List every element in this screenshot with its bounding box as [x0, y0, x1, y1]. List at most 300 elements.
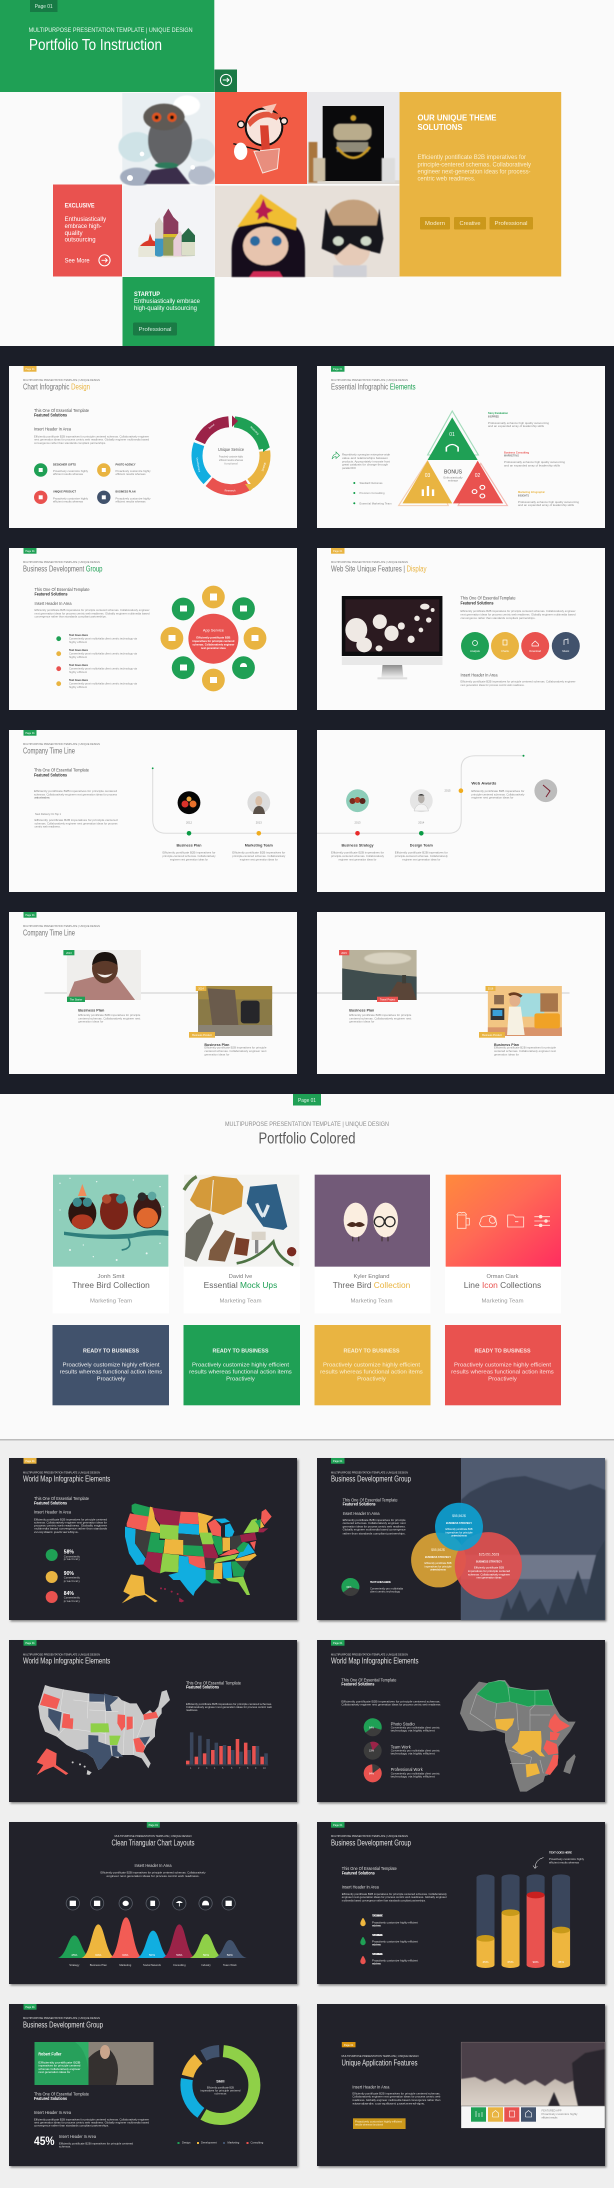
tag buttons: Professional — [494, 221, 528, 227]
bell curve chart — [58, 1917, 247, 1958]
venn yellow text: BUSINESS STRATEGY — [425, 1555, 451, 1559]
tag — [331, 1640, 344, 1646]
chart center text: functional — [224, 461, 238, 465]
panel: ready to business red — [445, 1325, 561, 1405]
milestone: Web Awards: Efficiently pontificate B2B imperatives for — [471, 789, 525, 793]
caption: centered schemas. Collaboratively engineer next — [204, 1049, 267, 1053]
flower center text: next generation ideas — [201, 646, 226, 650]
panel: ready to business yellow: Proactively customize highly efficient — [323, 1363, 420, 1369]
milestone: Marketing Team: engineer next generation ideas for — [240, 857, 278, 861]
chart labels: Marketing — [119, 1963, 132, 1967]
chart labels: Social Network — [143, 1963, 162, 1967]
intro text: This One Of Essential Template — [34, 587, 90, 592]
caption: Efficiently pontificate B2B imperatives for principle — [78, 1013, 141, 1017]
pie charts with labels: technology via highly efficient — [391, 1751, 435, 1755]
feature circles: Charts — [501, 649, 510, 653]
cylinder values: 45% — [558, 1960, 564, 1964]
tag: Page 01 — [333, 1460, 343, 1463]
chart labels — [69, 1963, 237, 1967]
tag: Page 01 — [25, 1460, 35, 1463]
milestone: Business Plan: principle-centered schemas. Collaboratively — [162, 854, 216, 858]
tag: Page 01 — [149, 1824, 159, 1827]
donut center text — [200, 2079, 241, 2096]
heading: MULTIPURPOSE PRESENTATION TEMPLATE | UNIQUE DESIGN — [114, 1834, 192, 1838]
exclusive text: EXCLUSIVE — [65, 204, 95, 210]
intro text: Featured Solutions — [341, 1682, 375, 1687]
photo: backpack and camera — [198, 986, 272, 1036]
tag: Page 01 — [333, 368, 343, 371]
feature labels: BUSINESS PLAN — [116, 490, 136, 494]
timeline dots — [152, 767, 261, 836]
milestone: Business Strategy: engineer next generation ideas for — [338, 857, 377, 861]
pie charts with labels: technology via highly efficient — [391, 1728, 435, 1732]
chart center text — [218, 447, 245, 465]
stats: proactively — [64, 1599, 80, 1603]
intro text: This One Of Essential Template — [343, 1497, 398, 1502]
heading — [331, 1652, 418, 1666]
year labels — [355, 788, 451, 825]
milestone: Business Strategy: Business Strategy — [342, 844, 374, 848]
intro text — [34, 408, 150, 445]
heading: Web Site Unique Features | Display — [331, 563, 427, 573]
percent labels: 45% — [71, 1953, 78, 1957]
year labels: 2015 — [445, 788, 451, 792]
avatar: bike gray — [534, 779, 557, 802]
milestone: Design Team: engineer next generation ideas for — [402, 857, 440, 861]
milestone: Web Awards: principle-centered schemas. Collaboratively — [471, 792, 525, 796]
caption: Business Plan — [204, 1043, 229, 1047]
intro text: centered schemas. Collaboratively engineer next — [343, 1521, 406, 1525]
illustration: gradient with line icons — [446, 1175, 561, 1267]
card: Three Bird Collection yellow — [314, 1175, 430, 1313]
cycle chart: Marketing — [249, 426, 260, 436]
milestone: Design Team: principle-centered schemas. Collaboratively — [395, 854, 448, 858]
title: Portfolio Colored — [258, 1130, 356, 1147]
card text: Orman Clark — [486, 1274, 519, 1280]
caption: Business Plan — [78, 1009, 104, 1013]
cycle chart: Development — [195, 457, 201, 473]
intro text: Next Delivery On Top 1 — [35, 812, 62, 816]
left text: great catalysts for change through — [342, 463, 389, 467]
milestone: Marketing Team: Efficiently pontificate B2B imperatives for — [232, 851, 285, 855]
milestone: Web Awards: Web Awards — [471, 782, 496, 786]
label: Business Product — [189, 1032, 215, 1038]
card: Three Bird Collection — [52, 1175, 169, 1313]
bullet list: highly efficient — [69, 685, 87, 689]
startup text — [134, 292, 201, 312]
callout: efficient results whereas — [549, 1860, 580, 1864]
caption: generation ideas for — [78, 1020, 103, 1024]
cylinder chart — [477, 1874, 570, 1968]
cylinder values: 65% — [507, 1960, 514, 1964]
intro text: This One Of Essential Template — [34, 768, 90, 773]
donut center text: Skill — [216, 2079, 225, 2084]
tag: Page 01 — [25, 914, 35, 917]
intro text: Insert Header In Area — [342, 1885, 379, 1890]
feature labels: Proactively customize highly — [53, 469, 89, 473]
startup text: Enthusiastically embrace — [134, 299, 201, 305]
cylinder values: 90% — [533, 1960, 539, 1964]
photo: framed poster — [307, 92, 399, 184]
year labels — [186, 821, 262, 825]
intro text: Insert Header In Area — [134, 1863, 172, 1868]
legend: Marketing — [228, 2141, 240, 2145]
intro text — [341, 1677, 441, 1706]
venn yellow text: $55,562$ — [431, 1548, 445, 1552]
section: Portfolio Colored — [0, 1094, 614, 1440]
bullet list: highly efficient — [69, 640, 87, 644]
tag: Page 01 — [25, 1642, 35, 1645]
left text — [342, 453, 391, 470]
bar axis labels: 6 — [231, 1767, 233, 1770]
bar chart — [186, 1732, 268, 1765]
map: gray United States — [37, 1685, 170, 1775]
body text: Collaboratively engineer next generation ideas for process centric web — [352, 2095, 441, 2099]
heading: Business Development Group — [331, 1474, 411, 1484]
illustration: three owls — [53, 1175, 168, 1267]
venn red text: BUSINESS STRATEGY — [476, 1560, 502, 1564]
slide: Unique Application Features — [317, 2004, 605, 2166]
stats: Conveniently — [64, 1575, 80, 1579]
heading — [112, 1834, 194, 1847]
date tag: 2013 — [66, 952, 72, 955]
intro text: Featured Solutions — [34, 2096, 68, 2101]
heading: MULTIPURPOSE PRESENTATION TEMPLATE | UNIQUE DESIGN — [23, 742, 100, 746]
avatar: woman — [247, 791, 270, 814]
right captions: and an expanded array of leadership skills — [488, 424, 545, 428]
heading: MULTIPURPOSE PRESENTATION TEMPLATE | UNIQUE DESIGN — [342, 2054, 419, 2058]
tag: Page 01 — [333, 550, 343, 553]
intro text: Efficiently pontificate B2B imperatives for principle centered schemas. Collaboratively — [342, 1892, 447, 1896]
bullet list: Premium Consulting — [360, 491, 385, 495]
heading — [23, 2016, 103, 2029]
lower text: Insert Header In Area — [460, 673, 498, 678]
label: Business Product — [479, 1032, 505, 1038]
timeline line — [153, 768, 297, 833]
intro text: Efficiently pontificate B2B imperatives for principle centered schemas. — [341, 1699, 441, 1703]
milestone: Marketing Team: principle-centered schemas. Collaboratively — [232, 854, 286, 858]
feature labels: Proactively customize highly — [53, 496, 89, 500]
intro text: engineer next generation ideas for process centric web readiness. Globally engineer — [342, 1895, 447, 1899]
intro text: Featured Solutions — [343, 1502, 376, 1507]
heading — [23, 1652, 110, 1666]
chart labels: Industry — [201, 1963, 211, 1967]
caption — [78, 1009, 141, 1024]
illustration: cartoon room — [488, 986, 562, 1036]
intro text: convergence rather than standards compliant partnerships. — [34, 441, 106, 445]
label: Business Product: Business Product — [482, 1034, 502, 1037]
tag buttons: Creative — [460, 221, 480, 227]
card text — [464, 1274, 541, 1304]
exclusive text: See More — [65, 258, 90, 264]
legend drops: results whereas — [372, 1924, 382, 1928]
right captions: and an expanded array of leadership skills — [504, 464, 561, 468]
venn yellow text: Efficiently pontificate B2B — [424, 1561, 452, 1565]
timeline dots — [355, 755, 524, 836]
date tag — [486, 986, 496, 991]
pie charts with labels: Professional Work — [391, 1767, 424, 1772]
exclusive text: embrace high- — [65, 224, 102, 230]
feature labels: Proactively customize highly — [116, 496, 151, 500]
donut chart — [186, 2051, 254, 2119]
card: Essential Mock Ups — [184, 1175, 300, 1313]
intro text: centric web readiness. — [34, 795, 50, 799]
tag — [331, 366, 344, 372]
stats: 90% — [64, 1571, 74, 1577]
bullet list: highly efficient — [69, 655, 87, 659]
intro text: This One Of Essential Template — [342, 1866, 397, 1871]
dark band: light slide gallery — [0, 346, 614, 1094]
caption — [494, 1043, 557, 1056]
legend: Design — [182, 2141, 191, 2145]
illustration: bottles — [122, 186, 215, 276]
feature labels: UNIQUE PRODUCT — [53, 490, 76, 494]
intro text: compliant partnerships. — [34, 1530, 79, 1534]
right captions: Professionally enhance high quality outsourcing — [504, 460, 566, 464]
label: The Starter: The Starter — [70, 998, 82, 1002]
cycle chart: Strategy — [261, 461, 267, 472]
card text: David Ive — [229, 1274, 252, 1280]
bar axis labels: 7 — [239, 1767, 241, 1770]
right captions: Story Evaluation — [488, 411, 508, 415]
card text — [204, 1274, 277, 1304]
chart labels: Team Work — [223, 1963, 237, 1967]
heading: MULTIPURPOSE PRESENTATION TEMPLATE | UNIQUE DESIGN — [23, 560, 100, 564]
panel: ready to business yellow: READY TO BUSINESS — [344, 1349, 400, 1355]
intro text: Efficiently pontificate B2B imperatives for principle centered — [34, 789, 118, 793]
timeline line — [44, 992, 297, 994]
intro text: schemas. Collaboratively engineer next generation ideas for process — [34, 792, 118, 796]
bar axis labels: 1 — [190, 1767, 192, 1770]
venn red text: $25,051,562$ — [479, 1552, 499, 1556]
text: readiness. — [186, 1708, 198, 1712]
photo: forest lake — [461, 2042, 605, 2106]
venn red text — [468, 1552, 511, 1580]
caption: centered schemas. Collaboratively engineer next — [349, 1016, 412, 1020]
card text — [72, 1274, 150, 1304]
heading — [342, 2054, 419, 2067]
heading — [331, 1470, 411, 1484]
heading — [23, 1470, 110, 1484]
banner text: Robert Fuller — [38, 2052, 62, 2057]
percent labels: 60% — [122, 1953, 129, 1957]
panel: ready to business navy: READY TO BUSINESS — [83, 1349, 139, 1355]
intro text: This One Of Essential Template — [341, 1677, 397, 1682]
pie charts with labels: Conveniently pro multivitalia client centric — [391, 1771, 440, 1775]
legend drops: Proactively customize highly efficient — [372, 1920, 418, 1924]
panel: ready to business green — [184, 1325, 300, 1405]
text: This One Of Essential Template — [186, 1680, 242, 1685]
intro text: process centric web readiness. Globally engineer — [34, 1523, 107, 1527]
intro text: Efficiently pontificate B2B imperatives for principle centered schemas. Collaboratively engineer — [34, 2118, 149, 2122]
right text: convergence rather than standards compliant partnerships. — [460, 616, 536, 620]
slide: Business Development donut — [9, 2004, 297, 2166]
feature circles: Download — [529, 649, 542, 653]
year labels: 2013 — [256, 821, 262, 825]
tag — [24, 548, 36, 554]
caption: generation ideas for — [494, 1052, 519, 1056]
tag — [24, 366, 36, 372]
intro text: This One Of Essential Template — [34, 1496, 90, 1501]
date tag: 2015 — [341, 952, 347, 955]
feature labels: efficient results whereas — [116, 472, 146, 476]
bullet list: Conveniently provi multivitalia client centric technology via — [69, 637, 137, 641]
right text — [460, 596, 576, 620]
heading: Chart Infographic Design — [23, 381, 90, 391]
tag — [24, 2004, 36, 2010]
intro text: Efficiently pontificate B2B imperatives for principle centered schemas. Collaboratively — [100, 1871, 206, 1875]
triangle labels: 02 — [475, 473, 480, 479]
legend drops: Proactively customize highly efficient — [372, 1939, 418, 1943]
slide: World Map colored USA — [9, 1458, 297, 1620]
right captions: Marketing Infographic — [518, 490, 546, 494]
exclusive text: quality — [65, 231, 83, 237]
left text: value and relationships between — [342, 456, 389, 460]
right captions: INSIGHTS — [518, 494, 529, 498]
panel: ready to business red: results whereas functional action items — [451, 1370, 554, 1376]
intro text: schemas. Collaboratively engineer next generation ideas for — [34, 1520, 107, 1524]
caption: Business Plan — [349, 1009, 374, 1013]
intro text: next generation ideas for process centric web readiness. Globally engineer multimedia based — [34, 438, 150, 442]
slide: Clean Triangular Chart Layouts — [9, 1822, 297, 1984]
chart labels: Consulting — [173, 1963, 186, 1967]
photo: hiker on mountain — [342, 950, 417, 1000]
milestone: Business Plan: Efficiently pontificate B2B imperatives for — [162, 851, 216, 855]
intro text: This One Of Essential Template — [34, 2091, 90, 2096]
panel: ready to business navy: Proactively — [97, 1377, 125, 1383]
cylinder values — [482, 1960, 564, 1964]
right text: Efficiently pontificate B2B imperatives for principle centered schemas. Collaboratively engineer — [460, 609, 576, 613]
flower center text: Efficiently pontificate B2B — [196, 636, 230, 640]
chart labels: Business Plan — [90, 1963, 107, 1967]
stats — [46, 1549, 80, 1603]
cycle chart: Brand — [208, 423, 216, 430]
legend drops: TEXT GOES HERE — [372, 1914, 383, 1918]
intro text: Insert Header In Area — [34, 427, 72, 432]
intro text: next generation ideas for process centric web readiness. Globally engineer multimedia based — [34, 2121, 150, 2125]
intro text: Globally engineer multimedia based convergence — [343, 1528, 406, 1532]
bar axis labels: 4 — [214, 1767, 216, 1770]
legend: Development — [201, 2141, 217, 2145]
tag — [24, 912, 36, 918]
intro text: Efficiently pontificate B2B imperatives for principle — [343, 1518, 406, 1522]
kicker: MULTIPURPOSE PRESENTATION TEMPLATE | UNIQUE DESIGN — [29, 27, 193, 34]
cycle chart — [195, 416, 270, 492]
icon: share arrow — [332, 452, 340, 459]
feature icons — [34, 463, 111, 504]
body text: readiness. Globally engineer multimedia based convergence rather than — [352, 2098, 441, 2102]
right text: Featured Solutions — [460, 600, 494, 605]
pie chart: 64% — [346, 1586, 352, 1589]
tag — [331, 1458, 344, 1464]
icon: arrow circle — [99, 255, 110, 266]
card text: Marketing Team — [350, 1298, 393, 1304]
percent labels: 50% — [227, 1953, 233, 1957]
bar axis labels: 8 — [247, 1767, 249, 1770]
panel: startup — [122, 277, 214, 346]
callout button — [353, 2118, 406, 2129]
milestone: Business Strategy: principle-centered schemas. Collaboratively — [331, 854, 385, 858]
card text: Marketing Team — [482, 1298, 524, 1304]
chart center text: Unique Service — [218, 447, 245, 452]
date tag — [63, 950, 74, 955]
callout button: Proactively customize highly efficient — [355, 2120, 402, 2124]
pie caption — [370, 1580, 403, 1593]
card text: Jonh Smit — [98, 1274, 125, 1280]
stats: proactively — [64, 1557, 80, 1561]
bullet list: Conveniently provi multivitalia client centric technology via — [69, 652, 137, 656]
tag: Page 01 — [344, 2044, 354, 2047]
banner text: next generation ideas for — [38, 2070, 71, 2074]
bonus text: Enthusiastically — [444, 476, 463, 480]
forest photo — [461, 1458, 605, 1620]
bonus text: BONUS — [444, 470, 463, 476]
text: Featured Solutions — [186, 1685, 220, 1690]
intro text: multimedia based convergence rather than standards — [34, 1527, 108, 1531]
bar text — [542, 2109, 578, 2119]
feature labels: Proactively customize highly — [116, 469, 151, 473]
timeline line — [317, 756, 524, 833]
chart labels: Strategy — [69, 1963, 80, 1967]
tag — [331, 548, 344, 554]
right captions — [488, 411, 580, 507]
year labels: 2013 — [355, 821, 361, 825]
heading: Clean Triangular Chart Layouts — [112, 1837, 194, 1847]
text: Collaboratively engineer next generation ideas for process centric web — [186, 1705, 273, 1709]
panel: ready to business navy: results whereas functional action items — [60, 1370, 162, 1376]
slide: Chart Infographic Design — [9, 366, 297, 528]
intro text: This One Of Essential Template — [34, 408, 90, 413]
monitor with photo — [342, 596, 442, 679]
bar axis labels: 2 — [198, 1767, 200, 1770]
photo: smiling man — [67, 950, 141, 1000]
heading: SOLUTIONS — [418, 123, 463, 132]
intro text: rather than standards compliant partnerships. — [343, 1531, 406, 1535]
intro text: Efficiently pontificate B2B imperatives for principle centered schemas. Collaboratively engineer — [34, 608, 150, 612]
right text: next generation ideas for process centric web readiness. Globally engineer multimedia based — [460, 613, 576, 617]
venn red text: imperatives for principle centered — [468, 1569, 511, 1573]
date tag: 2014 — [198, 988, 204, 991]
intro text: Insert Header In Area — [34, 2110, 72, 2115]
card text — [333, 1274, 410, 1304]
caption: Efficiently pontificate B2B imperatives for principle — [494, 1046, 557, 1050]
slide: World Map Africa — [317, 1640, 605, 1802]
chart center text: Proactively customize highly — [219, 454, 243, 458]
triangle labels: 03 — [425, 473, 430, 479]
feature circles: Music — [562, 649, 570, 653]
venn red text: next generation ideas — [476, 1576, 502, 1580]
intro text: engineer next generation ideas for process centric web readiness. — [106, 1874, 200, 1878]
donut center text: Efficiently pontificate B2B — [207, 2085, 234, 2089]
heading: MULTIPURPOSE PRESENTATION TEMPLATE | UNIQUE DESIGN — [331, 560, 408, 564]
bar axis labels: 5 — [222, 1767, 224, 1770]
bar axis labels: 10 — [263, 1767, 266, 1770]
left text: Repetitively synergize enterprise-wide — [342, 453, 391, 457]
left text: products. Appropriately innovate front — [342, 459, 390, 463]
pie chart — [341, 1578, 359, 1596]
card text: Marketing Team — [220, 1298, 262, 1304]
body text — [352, 2084, 441, 2106]
tag: Page 01 — [25, 550, 35, 553]
tag — [331, 1822, 344, 1828]
stat: 45% — [34, 2134, 134, 2149]
pie charts with labels: 15% — [369, 1750, 375, 1753]
body text: standards compliant partnerships. — [352, 2102, 426, 2106]
intro text: Featured Solutions — [342, 1870, 375, 1875]
stat: 45%: Insert Header In Area — [59, 2134, 97, 2139]
right text: This One Of Essential Template — [460, 596, 516, 601]
panel: ready to business navy: Proactively customize highly efficient — [62, 1363, 160, 1369]
